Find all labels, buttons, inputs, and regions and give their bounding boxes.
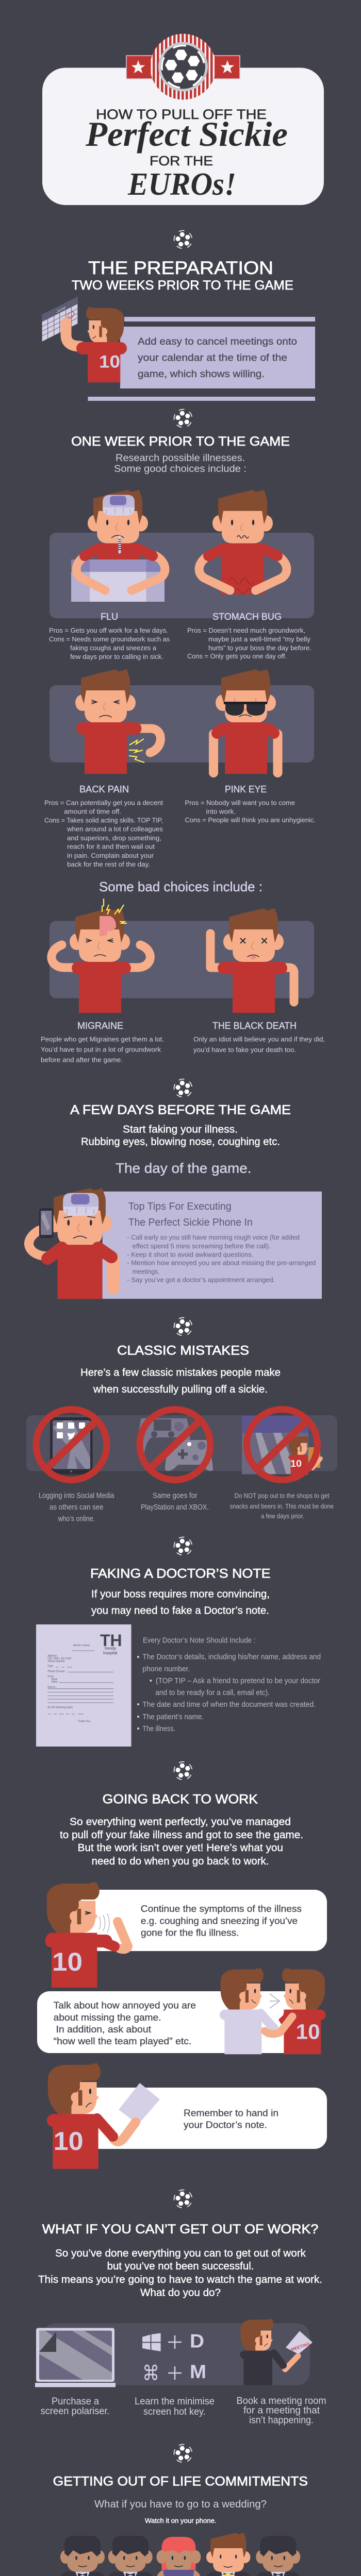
character: the black death	[210, 908, 294, 1013]
text: every doctor's note should include: (TOP TIP – Ask a friend to pretend to be your doctor	[156, 1676, 320, 1685]
text: tips	[127, 1201, 316, 1284]
section heading: going back to work: need to do when you go back to work.	[92, 1856, 269, 1867]
captions: watching at work: isn’t happening.	[249, 2415, 314, 2426]
text: talk about	[54, 2000, 196, 2046]
label and text: migraine: MIGRAINE	[77, 1021, 123, 1031]
captions: watching at work: Purchase a	[52, 2396, 99, 2407]
panel: sample doctor's note: Phone Number	[47, 1660, 65, 1663]
section heading: a few days before: Start faking your illness.	[123, 1124, 238, 1136]
captions: watching at work: for a meeting that	[243, 2405, 320, 2416]
label and text: migraine: People who get Migraines get them a lot.	[41, 1035, 164, 1043]
section heading: getting out of life commitments	[53, 2475, 308, 2524]
section heading: one week prior	[71, 434, 290, 474]
label and text: pink eye: PINK EYE	[225, 784, 267, 794]
icon: hotkeys	[142, 2331, 206, 2385]
label and text: migraine: before and after the game.	[41, 1056, 123, 1063]
section heading: going back to work	[60, 1792, 303, 1867]
label and text: stomach bug: Pros = Doesn’t need much groundwork,	[187, 626, 305, 634]
label and text: back pain	[44, 784, 163, 868]
text: remember to hand in: your Doctor’s note.	[184, 2120, 267, 2130]
label and text: back pain: and superiors, drop something,	[67, 834, 161, 842]
icon: football divider	[171, 1314, 195, 1339]
title text	[85, 107, 288, 202]
panel: sample doctor's note: doctor’s name:	[73, 1644, 90, 1647]
section heading: faking a doctor's note	[90, 1566, 270, 1617]
label and text: flu: Pros = Gets you off work for a few days.	[49, 626, 168, 634]
panel: continue the symptoms	[45, 1882, 327, 1988]
section heading: what if you can't get out of work: What do you do?	[140, 2287, 221, 2299]
text: continue symptoms: Continue the symptoms of the illness	[141, 1904, 302, 1914]
text: continue symptoms: gone for the flu illness.	[141, 1928, 239, 1938]
character: player holding note	[47, 2063, 136, 2169]
icon: football divider	[171, 1534, 195, 1558]
label and text: pink eye: Cons = People will think you are unhygienic.	[185, 816, 316, 824]
panel: sample doctor's note: City, State, Zip Code	[47, 1657, 71, 1660]
text: talk about: Talk about how annoyed you are	[54, 2000, 196, 2010]
character: player in meeting room: MEETING	[290, 2342, 310, 2352]
icon: speech lines	[270, 1994, 280, 2008]
title text: HOW TO PULL OFF THE	[96, 107, 267, 122]
emblem: football badge with stars	[126, 34, 240, 100]
section heading: what if you can't get out of work: but you’ve not been successful.	[107, 2261, 254, 2272]
mistake: popping to the shops	[242, 1410, 321, 1480]
panel: classic mistakes strip	[26, 1415, 337, 1471]
label and text: stomach bug	[187, 612, 311, 660]
mistake: games console controllers	[139, 1410, 213, 1480]
text: every doctor's note should include: phone number.	[142, 1665, 190, 1673]
character: player pointing at calendar: 10	[99, 352, 120, 372]
section heading: getting out of life commitments: Watch it on your phone.	[145, 2517, 217, 2524]
text: add meetings tip: game, which shows willing.	[138, 368, 265, 380]
character: flu	[71, 490, 165, 602]
captions: watching at work	[41, 2396, 326, 2426]
text: every doctor's note should include: and to be ready for a call, email etc).	[155, 1688, 270, 1697]
section heading: going back to work: GOING BACK TO WORK	[103, 1792, 258, 1807]
text: talk about: In addition, ask about	[56, 2024, 151, 2035]
panel: sample doctor's note: trendy	[105, 1646, 116, 1651]
section heading: what if you can't get out of work: So you’ve done everything you can to get out of work	[55, 2248, 306, 2259]
panel: sample doctor's note: for the following dates	[47, 1706, 73, 1709]
captions: classic mistakes	[39, 1492, 334, 1523]
icon: football divider	[171, 2441, 195, 2466]
heading: bad choices: Some bad choices include :	[99, 879, 262, 894]
character: coughing player	[45, 1882, 128, 1988]
title text: Perfect Sickie	[85, 114, 288, 154]
panel: sample doctor's note: Work	[52, 1678, 58, 1681]
character: player holding note: 10	[54, 2127, 84, 2156]
title text: EUROs!	[127, 167, 236, 202]
panel: good illnesses row one	[50, 533, 314, 618]
label and text: stomach bug: STOMACH BUG	[212, 612, 282, 622]
label and text: back pain: when around a lot of colleagues	[67, 825, 163, 833]
section heading: going back to work: to pull off your fake illness and got to see the game.	[60, 1829, 303, 1841]
label and text: stomach bug: hurts” to your boss the day before.	[208, 644, 311, 652]
section heading: one week prior: Research possible illnesses.	[116, 453, 245, 464]
panel: watching at work strip	[43, 2324, 310, 2385]
captions: classic mistakes: Same goes for	[153, 1492, 198, 1500]
text: every doctor's note should include	[137, 1636, 321, 1733]
text: continue symptoms	[141, 1904, 302, 1938]
panel: sample doctor's note: Due to :	[47, 1686, 57, 1689]
text: remember to hand in: Remember to hand in	[184, 2108, 278, 2118]
section heading: one week prior: ONE WEEK PRIOR TO THE GAME	[71, 434, 290, 449]
captions: watching at work: screen hot key.	[143, 2406, 206, 2417]
text: add meetings tip: your calendar at the time of the	[138, 352, 287, 364]
label and text: stomach bug: Cons = Only gets you one day off.	[187, 652, 287, 660]
character: player in meeting room	[240, 2318, 313, 2385]
character: player phoning in sick	[29, 1188, 113, 1299]
label and text: pink eye: Pros = Nobody will want you to come	[185, 799, 295, 807]
text: every doctor's note should include: The date and time of when the document was created.	[142, 1700, 316, 1709]
section heading: a few days before: The day of the game.	[116, 1160, 252, 1176]
panel: sample doctor's note: Other	[52, 1681, 58, 1684]
panel: two weeks prior calendar tip	[42, 297, 315, 401]
text: tips: - Call early so you still have morning rough voice (for added	[127, 1234, 300, 1241]
captions: classic mistakes: who’s online.	[58, 1515, 95, 1523]
captions: classic mistakes: a few days prior.	[261, 1512, 304, 1520]
text: every doctor's note should include: The Doctor’s details, including his/her name, address and	[142, 1653, 321, 1662]
label and text: flu: faking coughs and sneezes a	[70, 644, 157, 652]
icon: wall calendar: June	[57, 304, 65, 314]
label and text: pink eye: into work.	[206, 807, 236, 815]
captions: watching at work: screen polariser.	[41, 2406, 109, 2417]
icon: football divider	[171, 227, 195, 252]
icon: football divider	[171, 406, 195, 431]
panel: sample doctor's note	[36, 1624, 131, 1747]
text: tips: - Keep it short to avoid awkward questions.	[127, 1251, 253, 1259]
captions: watching at work: Learn the minimise	[135, 2396, 215, 2407]
icon: laptop with screen polariser	[35, 2328, 116, 2387]
section heading: going back to work: So everything went perfectly, you’ve managed	[70, 1817, 291, 1828]
panel: sample doctor's note: From	[47, 1675, 54, 1679]
panel: sample doctor's note: Please Excuse :	[47, 1670, 66, 1673]
label and text: migraine	[41, 1021, 164, 1063]
section heading: classic mistakes: when successfully pulling off a sickie.	[93, 1384, 268, 1395]
section heading: a few days before	[70, 1103, 291, 1176]
text: tips: effect spend 5 mins screaming before the call).	[133, 1243, 271, 1250]
panel: talk about missing the game	[37, 1968, 326, 2054]
label and text: back pain: in pain. Complain about your	[67, 852, 154, 859]
panel: sickie phone-in tips	[29, 1188, 322, 1299]
section heading: faking a doctor's note: FAKING A DOCTOR’S NOTE	[90, 1566, 270, 1581]
text: every doctor's note should include: Every Doctor’s Note Should Include :	[143, 1636, 256, 1645]
panel: sample doctor's note: hospital	[103, 1651, 118, 1655]
section heading: a few days before: Rubbing eyes, blowing nose, coughing etc.	[81, 1137, 280, 1148]
icon: football divider	[171, 1076, 195, 1100]
text: continue symptoms: e.g. coughing and sneezing if you’ve	[141, 1916, 298, 1926]
text: tips: meetings.	[133, 1268, 160, 1276]
label and text: the black death: you’d have to fake your death too.	[193, 1046, 296, 1054]
label and text: back pain: BACK PAIN	[79, 784, 129, 794]
text: talk about: about missing the game.	[54, 2012, 161, 2023]
section heading: getting out of life commitments: What if you have to go to a wedding?	[94, 2499, 267, 2510]
label and text: flu: few days prior to calling in sick.	[70, 653, 163, 660]
section heading: faking a doctor's note: If your boss requires more convincing,	[91, 1589, 270, 1600]
character: colleague	[220, 1968, 275, 2054]
panel: sample doctor's note: TH	[100, 1631, 122, 1650]
text: every doctor's note should include: The patient’s name.	[142, 1713, 204, 1721]
mistake: social media tablet	[36, 1410, 107, 1480]
label and text: stomach bug: maybe just a well-timed “my belly	[208, 635, 311, 643]
section heading: getting out of life commitments: GETTING OUT OF LIFE COMMITMENTS	[53, 2475, 308, 2489]
text: add meetings tip	[138, 336, 297, 380]
character: player talking: 10	[296, 2020, 320, 2044]
text: tips: Top Tips For Executing	[128, 1201, 232, 1212]
character: coughing player: 10	[52, 1947, 83, 1976]
character: pink eye	[214, 669, 277, 774]
captions: classic mistakes: snacks and beers in. This must be done	[230, 1502, 334, 1510]
icon: doctor's note paper	[119, 2083, 160, 2125]
captions: classic mistakes: Do NOT pop out to the shops to get	[234, 1492, 330, 1500]
label and text: pink eye	[185, 784, 316, 824]
captions: classic mistakes: as others can see	[50, 1503, 103, 1512]
panel: sample doctor's note: Address	[47, 1655, 57, 1658]
text: tips: - Say you’ve got a doctor’s appointment arranged.	[127, 1277, 275, 1284]
label and text: the black death: THE BLACK DEATH	[212, 1021, 297, 1031]
captions: classic mistakes: Logging into Social Media	[39, 1492, 114, 1500]
panel: bad illnesses	[50, 921, 314, 998]
label and text: back pain: amount of time off.	[64, 807, 121, 815]
character: migraine	[52, 899, 150, 1013]
character: player talking	[268, 1968, 326, 2054]
section heading: classic mistakes	[80, 1343, 281, 1395]
label and text: flu	[49, 612, 170, 660]
character: stomach bug	[199, 490, 287, 595]
character: player with phone at wedding	[205, 2533, 251, 2576]
label and text: flu: Cons = Needs some groundwork such as	[49, 635, 170, 643]
label and text: back pain: back for the rest of the day.	[67, 860, 150, 868]
section heading: the preparation: THE PREPARATION	[88, 258, 273, 278]
icon: prohibition sign	[140, 1410, 210, 1480]
icon: prohibition sign	[36, 1410, 107, 1480]
panel: good illnesses row two	[50, 685, 314, 762]
section heading: one week prior: Some good choices include :	[114, 464, 247, 474]
section heading: what if you can't get out of work	[38, 2222, 322, 2299]
panel: sample doctor's note: Date	[47, 1665, 53, 1668]
label and text: the black death: Only an idiot will believe you and if they did,	[193, 1035, 325, 1043]
text: talk about: “how well the team played” etc.	[54, 2036, 191, 2046]
text: remember to hand in	[184, 2108, 278, 2130]
icon: brain	[100, 916, 116, 936]
label and text: the black death	[193, 1021, 325, 1054]
section heading: classic mistakes: CLASSIC MISTAKES	[117, 1343, 249, 1358]
icon: hotkeys: D	[190, 2331, 204, 2352]
section heading: faking a doctor's note: you may need to fake a Doctor’s note.	[91, 1605, 269, 1617]
icon: hotkeys: ⌘	[142, 2362, 159, 2385]
title text: FOR THE	[150, 153, 213, 168]
panel: title card	[42, 34, 324, 205]
icon: prohibition sign	[247, 1410, 318, 1480]
section heading: a few days before: A FEW DAYS BEFORE THE GAME	[70, 1103, 291, 1117]
label and text: back pain: Pros = Can potentially get you a decent	[44, 799, 163, 807]
panel: hand in doctor's note	[47, 2063, 327, 2169]
icon: wall calendar	[42, 297, 77, 342]
label and text: back pain: reach for it and then wail out	[67, 843, 155, 851]
label and text: flu: FLU	[101, 612, 118, 622]
section heading: what if you can't get out of work: WHAT IF YOU CAN’T GET OUT OF WORK?	[42, 2222, 318, 2236]
captions: watching at work: Book a meeting room	[236, 2396, 326, 2406]
captions: classic mistakes: PlayStation and XBOX.	[141, 1503, 209, 1512]
section heading: what if you can't get out of work: This means you’re going to have to watch the game at work.	[38, 2274, 322, 2285]
text: every doctor's note should include: The illness.	[142, 1724, 175, 1733]
character: bride guest	[155, 2537, 202, 2576]
text: tips: The Perfect Sickie Phone In	[128, 1217, 253, 1228]
mistake: popping to the shops: 10	[290, 1459, 302, 1469]
icon: football divider	[171, 2187, 195, 2211]
icon: hotkeys: M	[190, 2361, 206, 2382]
illustration: wedding guests	[59, 2533, 301, 2576]
icon: football divider	[171, 1758, 195, 1783]
text: add meetings tip: Add easy to cancel meetings onto	[138, 336, 297, 347]
section heading: classic mistakes: Here’s a few classic mistakes people make	[80, 1367, 281, 1379]
section heading: the preparation	[72, 258, 293, 293]
label and text: migraine: You’d have to put in a lot of groundwork	[41, 1046, 161, 1053]
character: back pain	[75, 669, 160, 774]
character: player pointing at calendar	[66, 307, 127, 382]
panel: sample doctor's note: Thank You.	[78, 1720, 91, 1723]
section heading: the preparation: TWO WEEKS PRIOR TO THE GAME	[72, 278, 293, 293]
section heading: going back to work: But the work isn’t over yet! Here’s what you	[77, 1842, 283, 1854]
label and text: back pain: Cons = Takes solid acting skills. TOP TIP,	[44, 817, 163, 824]
text: tips: - Mention how annoyed you are about missing the pre-arranged	[127, 1260, 316, 1267]
